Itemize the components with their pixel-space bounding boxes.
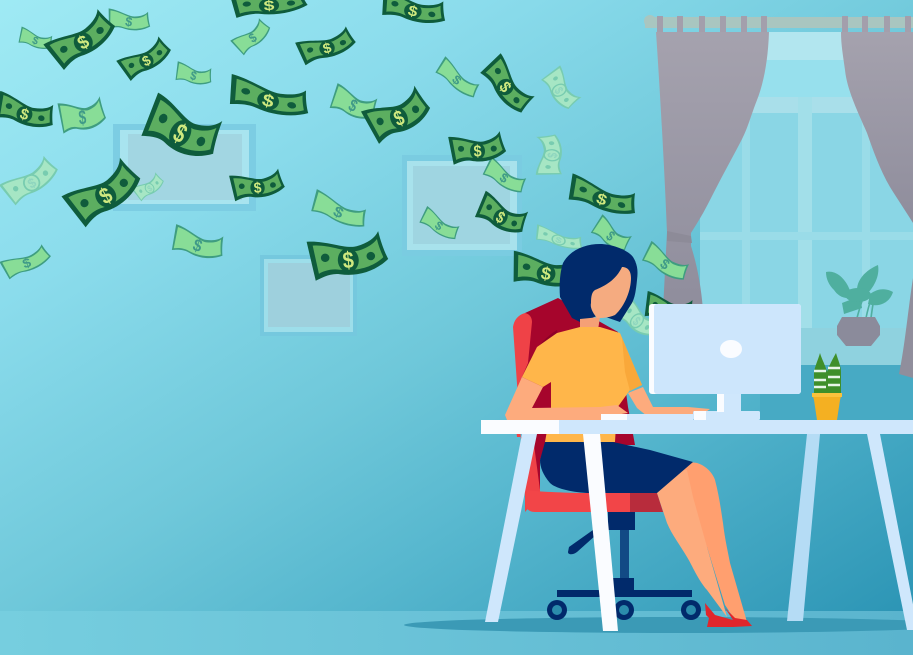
bill: light 1	[106, 6, 152, 34]
flying money: faded bills	[0, 64, 664, 343]
curtain rod	[644, 15, 913, 32]
bill: dark 9	[230, 0, 308, 18]
left arm	[505, 377, 628, 420]
bill: dark 18: $	[663, 302, 674, 320]
bill: light 10: $	[497, 170, 512, 187]
curtain: right	[841, 32, 913, 378]
hair	[560, 244, 638, 322]
desk top	[481, 420, 913, 434]
bill: light 13	[589, 212, 635, 257]
bill: dark 4: $	[169, 117, 192, 149]
bill: light 6: $	[190, 236, 204, 256]
picture frame 3	[260, 255, 357, 336]
bill: light 3	[173, 59, 215, 89]
bill: light 12	[417, 204, 463, 245]
red shoes	[705, 603, 752, 627]
bill: dark 8	[294, 25, 358, 66]
front leg	[657, 470, 727, 617]
bill: faded 4: $	[545, 152, 561, 159]
bill: dark 14	[472, 188, 532, 241]
bill: light 14: $	[657, 256, 672, 274]
bill: dark 6: $	[95, 183, 117, 210]
bill: dark 3	[0, 88, 59, 135]
bill: faded 2	[130, 171, 167, 203]
desk leg: right front	[867, 434, 913, 630]
right arm	[628, 387, 710, 418]
bill: dark 12: $	[495, 79, 514, 96]
bill: faded 6	[614, 294, 664, 343]
bill: dark 16: $	[342, 246, 355, 274]
chair back	[522, 298, 635, 490]
bill: dark 5	[224, 71, 314, 124]
desk	[481, 420, 913, 631]
bill: dark 12	[478, 51, 538, 119]
bill: dark 18	[641, 288, 697, 328]
bill: dark 16	[306, 230, 390, 281]
bill: light 1: $	[124, 13, 133, 30]
bill: dark 2: $	[139, 51, 154, 70]
chair seat	[525, 490, 663, 512]
bill: dark 13	[448, 131, 507, 165]
bill: dark 3: $	[18, 105, 31, 124]
desk cactus	[812, 353, 842, 420]
floor	[0, 611, 913, 655]
bill: light 9	[433, 55, 483, 103]
bill: light 13: $	[603, 227, 619, 245]
picture frame 2	[402, 155, 522, 256]
bill: light 6	[168, 221, 228, 265]
bill: dark 1: $	[73, 30, 93, 54]
bill: dark 8: $	[321, 40, 333, 58]
bill: faded 5: $	[554, 236, 563, 246]
bill: light 11: $	[331, 204, 346, 222]
bill: light 4	[229, 16, 275, 57]
bill: dark 2	[115, 34, 175, 83]
bill: dark 15	[564, 171, 641, 222]
picture frame 1	[113, 124, 256, 211]
bill: dark 17: $	[539, 263, 553, 284]
bill: light 4: $	[246, 30, 260, 46]
bill: light 10	[480, 155, 530, 199]
bill: light 11	[307, 187, 371, 234]
bill: light 5: $	[78, 105, 87, 129]
face	[591, 267, 631, 318]
bill: light 7	[0, 243, 54, 281]
bill: dark 10	[378, 0, 450, 30]
bill: light 9: $	[449, 72, 465, 88]
bill: light 7: $	[20, 254, 33, 271]
shirt sleeve	[622, 338, 642, 391]
bill: faded 4	[533, 133, 565, 177]
bill: dark 15: $	[594, 190, 610, 209]
bill: dark 1	[42, 6, 121, 73]
bill: dark 13: $	[473, 142, 482, 161]
desk leg: far right back	[787, 434, 820, 621]
skirt	[540, 442, 693, 493]
chair base	[608, 512, 635, 530]
bill: light 12: $	[432, 218, 446, 234]
bill: dark 11	[359, 83, 435, 146]
desk leg: white front	[583, 434, 618, 631]
bill: faded 3: $	[551, 85, 566, 97]
flying money: dark bills	[0, 0, 697, 328]
bill: light 2: $	[30, 35, 40, 48]
office chair	[513, 298, 701, 620]
bill: faded 2: $	[146, 183, 154, 194]
back leg	[657, 462, 747, 622]
desk leg: left back	[485, 434, 537, 622]
bill: dark 7: $	[253, 180, 262, 197]
bill: light 8	[327, 80, 381, 126]
bill: light 3: $	[189, 69, 199, 84]
curtain: left	[656, 32, 769, 310]
window plant	[826, 265, 893, 346]
bill: faded 3	[540, 64, 583, 114]
bill: faded 6: $	[630, 315, 643, 329]
bill: light 8: $	[345, 96, 360, 116]
neck	[580, 317, 600, 333]
chair back edge	[513, 313, 540, 512]
bill: dark 4	[136, 88, 229, 170]
bill: dark 7	[229, 168, 286, 202]
bill: dark 10: $	[406, 3, 419, 21]
keyboard	[601, 411, 706, 420]
bill: faded 5	[533, 223, 586, 254]
flying money: light bills	[0, 6, 693, 286]
woman	[505, 244, 752, 627]
window	[700, 32, 913, 420]
bill: dark 5: $	[260, 91, 276, 112]
bill: dark 11: $	[391, 106, 408, 132]
bill: light 14	[639, 239, 693, 286]
computer monitor	[649, 304, 801, 420]
bill: light 2	[16, 25, 55, 54]
bill: dark 14: $	[492, 209, 508, 228]
torso shirt	[522, 327, 642, 442]
floor shadow	[404, 617, 913, 633]
bill: light 5	[57, 96, 107, 134]
bill: dark 17	[509, 247, 585, 293]
bill: faded 1	[0, 153, 63, 207]
bill: faded 1: $	[25, 175, 39, 192]
bill: dark 6	[59, 154, 148, 230]
